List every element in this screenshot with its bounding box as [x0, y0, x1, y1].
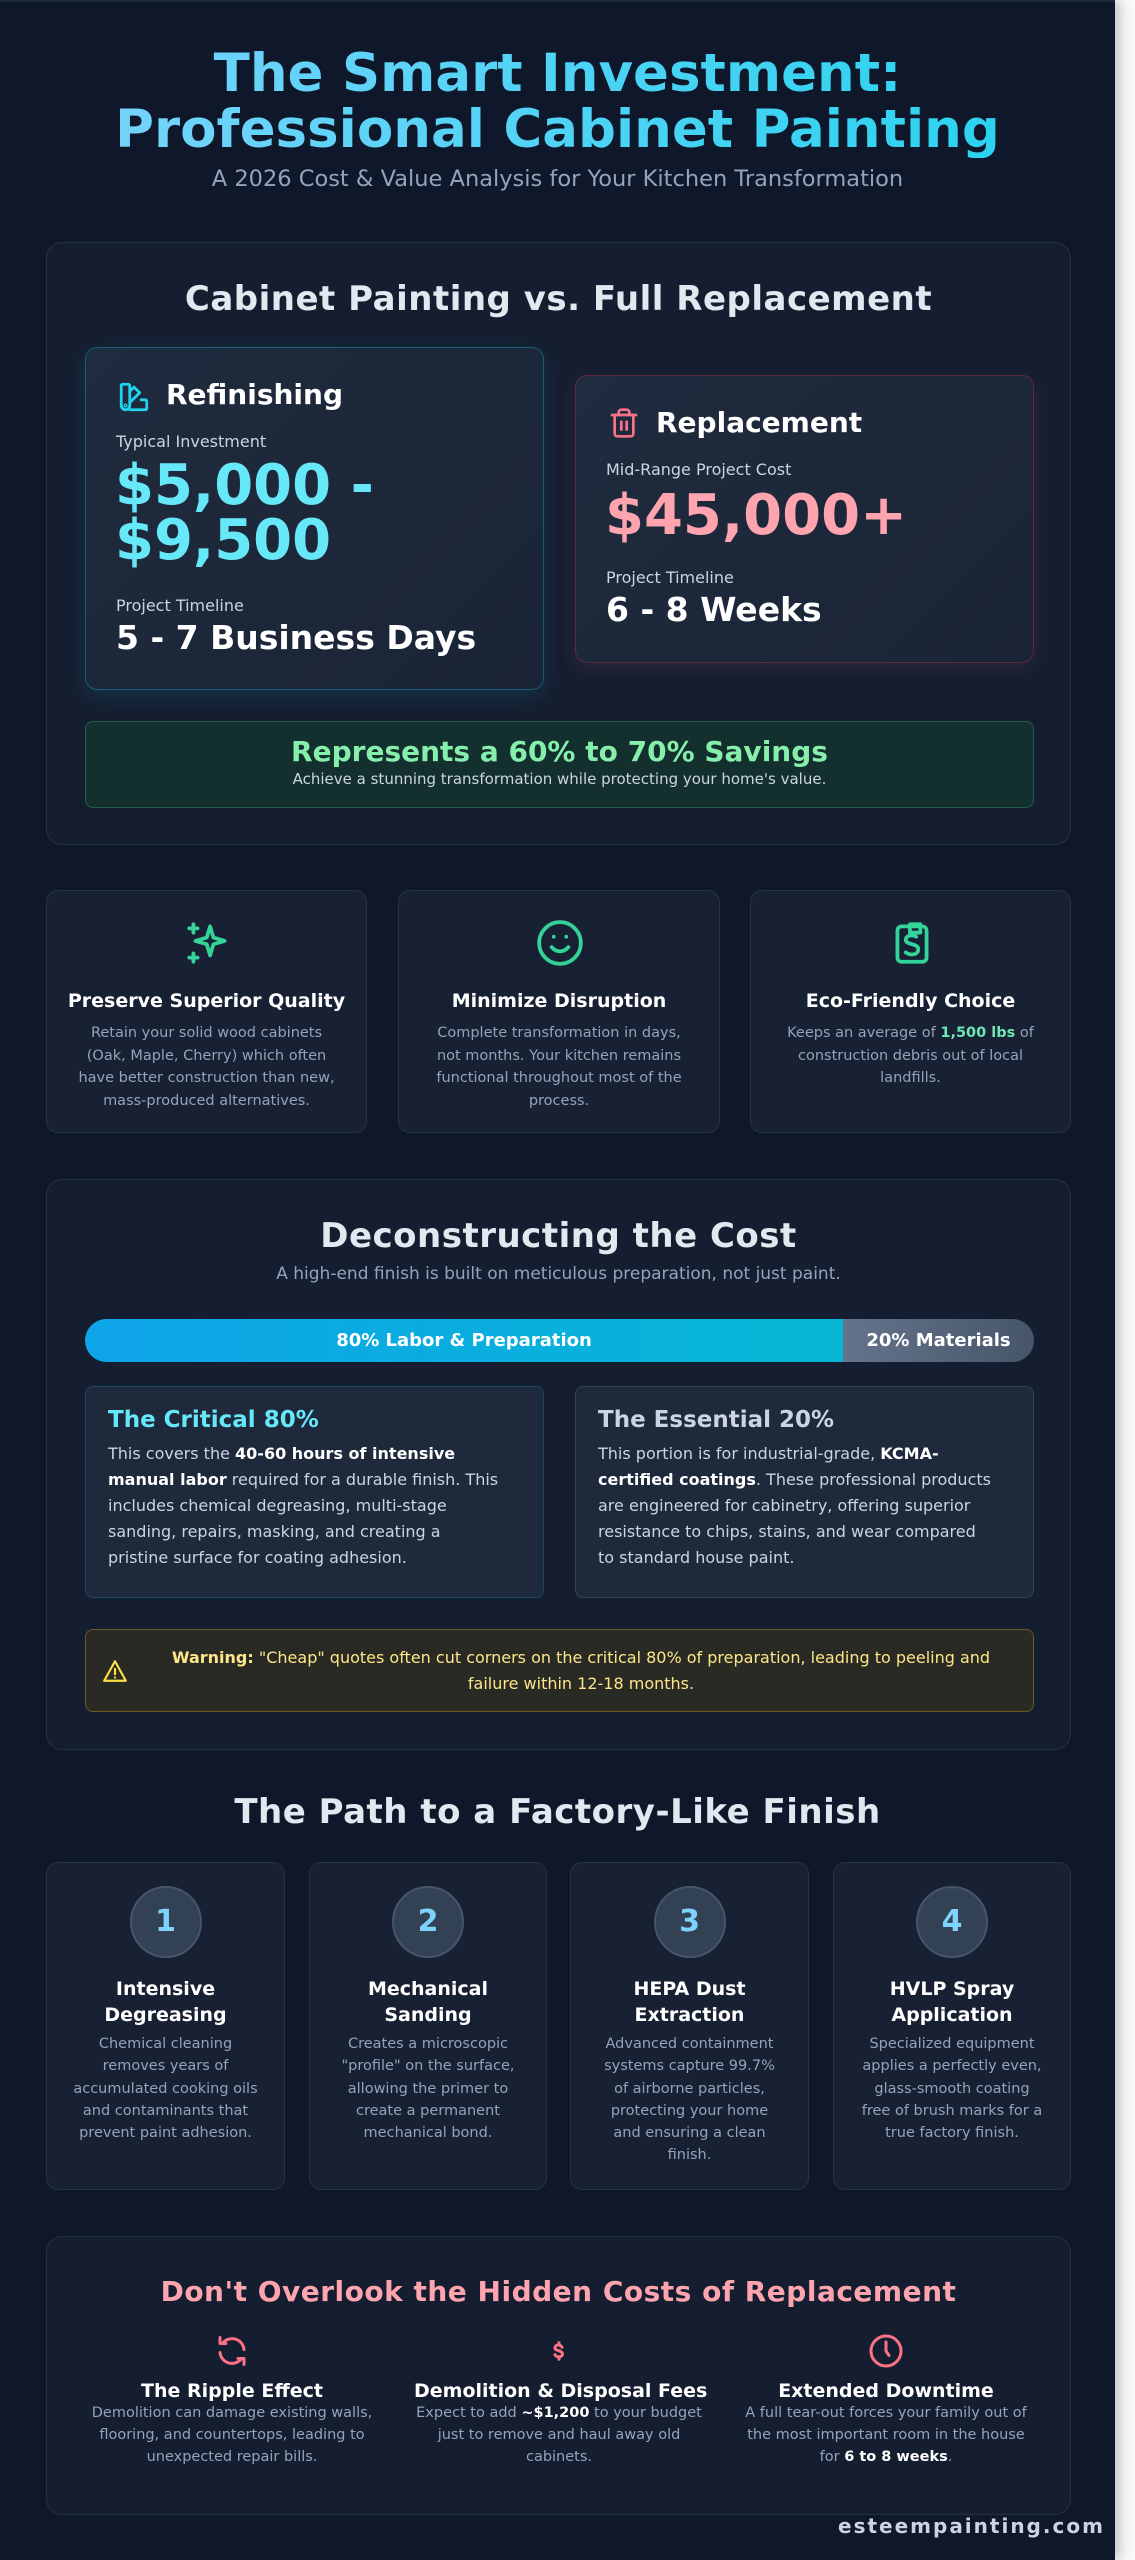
item: demolition: [414, 2341, 707, 2465]
panel: comparison: [46, 242, 1071, 845]
bar chart: 80/20: [85, 1319, 1034, 1362]
label: Mid-Range Project Cost: [606, 460, 791, 479]
icon: number 3: [654, 1886, 726, 1958]
card: essential 20: This portion is for industrial-grade, KCMA-certified coatings. These professional products are engineered for cabinetry, offering superior resistance to chips, stains, and wear compared to standard house paint.: [598, 1444, 991, 1567]
footer: brand: esteempainting.com: [838, 2514, 1105, 2538]
panel: step 3: HEPA Dust: [633, 1978, 746, 2000]
panel: benefit eco: Keeps an average of 1,500 lbs of construction debris out of local landfills.: [787, 1025, 1034, 1086]
panel: step 3: Extraction: [635, 2004, 744, 2026]
callout: savings: [85, 721, 1034, 808]
panel: step 4: HVLP Spray: [890, 1978, 1014, 2000]
heading: comparison: Cabinet Painting vs. Full Replacement: [185, 279, 932, 319]
item: ripple: The Ripple Effect: [141, 2380, 323, 2402]
label: Project Timeline: [606, 568, 734, 587]
panel: benefit quality: [46, 890, 367, 1133]
card: critical 80: The Critical 80%: [108, 1407, 319, 1433]
bar chart: 80/20: 80% Labor & Preparation: [336, 1330, 592, 1351]
panel: step 2: Sanding: [384, 2004, 472, 2026]
icon: smile: [537, 920, 583, 966]
icon: dollar: [553, 2341, 564, 2361]
icon: number 3: 3: [679, 1904, 700, 1939]
panel: step 4: [833, 1862, 1071, 2190]
panel: step 2: Creates a microscopic "profile" on the surface, allowing the primer to create a permanent mechanical bond.: [341, 2036, 515, 2141]
panel: benefit disruption: [398, 890, 720, 1133]
icon: number 2: [392, 1886, 464, 1958]
icon: warning: [103, 1660, 127, 1682]
panel: step 1: Degreasing: [104, 2004, 227, 2026]
panel: benefit eco: [750, 890, 1071, 1133]
panel: step 4: Application: [891, 2004, 1013, 2026]
icon: number 1: 1: [155, 1904, 176, 1939]
bar chart: 80/20: 20% Materials: [866, 1330, 1011, 1351]
label: Project Timeline: [116, 596, 244, 615]
panel: benefit quality: Retain your solid wood cabinets (Oak, Maple, Cherry) which often have better construction than new, mass-produced alternatives.: [78, 1025, 335, 1108]
panel: step 4: Specialized equipment applies a perfectly even, glass-smooth coating free of brush marks for a true factory finish.: [862, 2036, 1042, 2141]
panel: step 3: Advanced containment systems capture 99.7% of airborne particles, protecting your home and ensuring a clean finish.: [604, 2036, 775, 2163]
title: Professional Cabinet Painting: [115, 99, 1000, 160]
card: critical 80: This covers the 40-60 hours of intensive manual labor required for a durable finish. This includes chemical degreasing, multi-stage sanding, repairs, masking, and creating a pristine surface for coating adhesion.: [108, 1444, 498, 1567]
card: refinishing: [85, 347, 544, 690]
icon: sparkles: [187, 922, 227, 964]
text: Preserve Superior Quality: [68, 990, 345, 1012]
heading: Don't Overlook the Hidden Costs of Replacement: [161, 2275, 956, 2308]
title: [0, 46, 1115, 158]
card: essential 20: The Essential 20%: [598, 1407, 834, 1433]
panel: step 2: [309, 1862, 547, 2190]
panel: step 2: Mechanical: [368, 1978, 488, 2000]
price: $5,000 -: [115, 453, 374, 518]
panel: step 1: Chemical cleaning removes years of accumulated cooking oils and contaminants that prevent paint adhesion.: [73, 2036, 258, 2141]
panel: cost breakdown: [46, 1179, 1071, 1750]
timeline: 6 - 8 Weeks: [606, 590, 822, 629]
price: [115, 453, 374, 573]
panel: step 1: [46, 1862, 285, 2190]
icon: swatch: [120, 382, 148, 412]
card: critical 80: [85, 1386, 544, 1598]
icon: number 1: [130, 1886, 202, 1958]
timeline: 5 - 7 Business Days: [116, 618, 476, 657]
icon: refresh: [218, 2336, 246, 2366]
card: replacement: [575, 375, 1034, 663]
callout: savings: Achieve a stunning transformation while protecting your home's value.: [293, 770, 826, 788]
card: essential 20: [575, 1386, 1034, 1598]
subtitle: A 2026 Cost & Value Analysis for Your Kitchen Transformation: [212, 166, 903, 192]
icon: number 4: 4: [942, 1904, 962, 1939]
icon: number 2: 2: [418, 1904, 438, 1939]
icon: clock: [870, 2334, 902, 2368]
text: Eco-Friendly Choice: [806, 990, 1015, 1012]
card title: Refinishing: [166, 378, 343, 411]
icon: recycle bin dollar: [896, 922, 928, 964]
callout: warning: Warning: "Cheap" quotes often cut corners on the critical 80% of preparation, leading to peeling and failure within 12-18 months.: [172, 1648, 990, 1693]
panel: hidden costs: [46, 2236, 1071, 2515]
panel: benefit disruption: Complete transformation in days, not months. Your kitchen remains functional throughout most of the process.: [436, 1025, 682, 1108]
item: ripple: [92, 2336, 372, 2465]
price: $45,000+: [605, 483, 907, 548]
card title: Replacement: [656, 406, 862, 439]
text: Minimize Disruption: [452, 990, 666, 1012]
price: $9,500: [115, 508, 331, 573]
subheading: A high-end finish is built on meticulous preparation, not just paint.: [276, 1264, 841, 1284]
title: The Smart Investment:: [214, 43, 901, 104]
item: downtime: Extended Downtime: [778, 2380, 994, 2402]
icon: number 4: [916, 1886, 988, 1958]
panel: step 3: [570, 1862, 809, 2190]
item: demolition: Expect to add ~$1,200 to your budget just to remove and haul away old cabinets.: [416, 2405, 702, 2465]
callout: savings: Represents a 60% to 70% Savings: [291, 735, 828, 768]
label: Typical Investment: [116, 432, 266, 451]
callout: warning: [85, 1629, 1034, 1712]
item: demolition: Demolition & Disposal Fees: [414, 2380, 707, 2402]
item: downtime: A full tear-out forces your family out of the most important room in the house for 6 to 8 weeks.: [745, 2405, 1027, 2465]
panel: step 1: Intensive: [116, 1978, 215, 2000]
heading: process: The Path to a Factory-Like Finish: [234, 1792, 881, 1832]
item: downtime: [745, 2334, 1027, 2465]
icon: trash: [610, 408, 638, 438]
item: ripple: Demolition can damage existing walls, flooring, and countertops, leading to unexpected repair bills.: [92, 2405, 372, 2465]
heading: Deconstructing the Cost: [320, 1216, 797, 1256]
